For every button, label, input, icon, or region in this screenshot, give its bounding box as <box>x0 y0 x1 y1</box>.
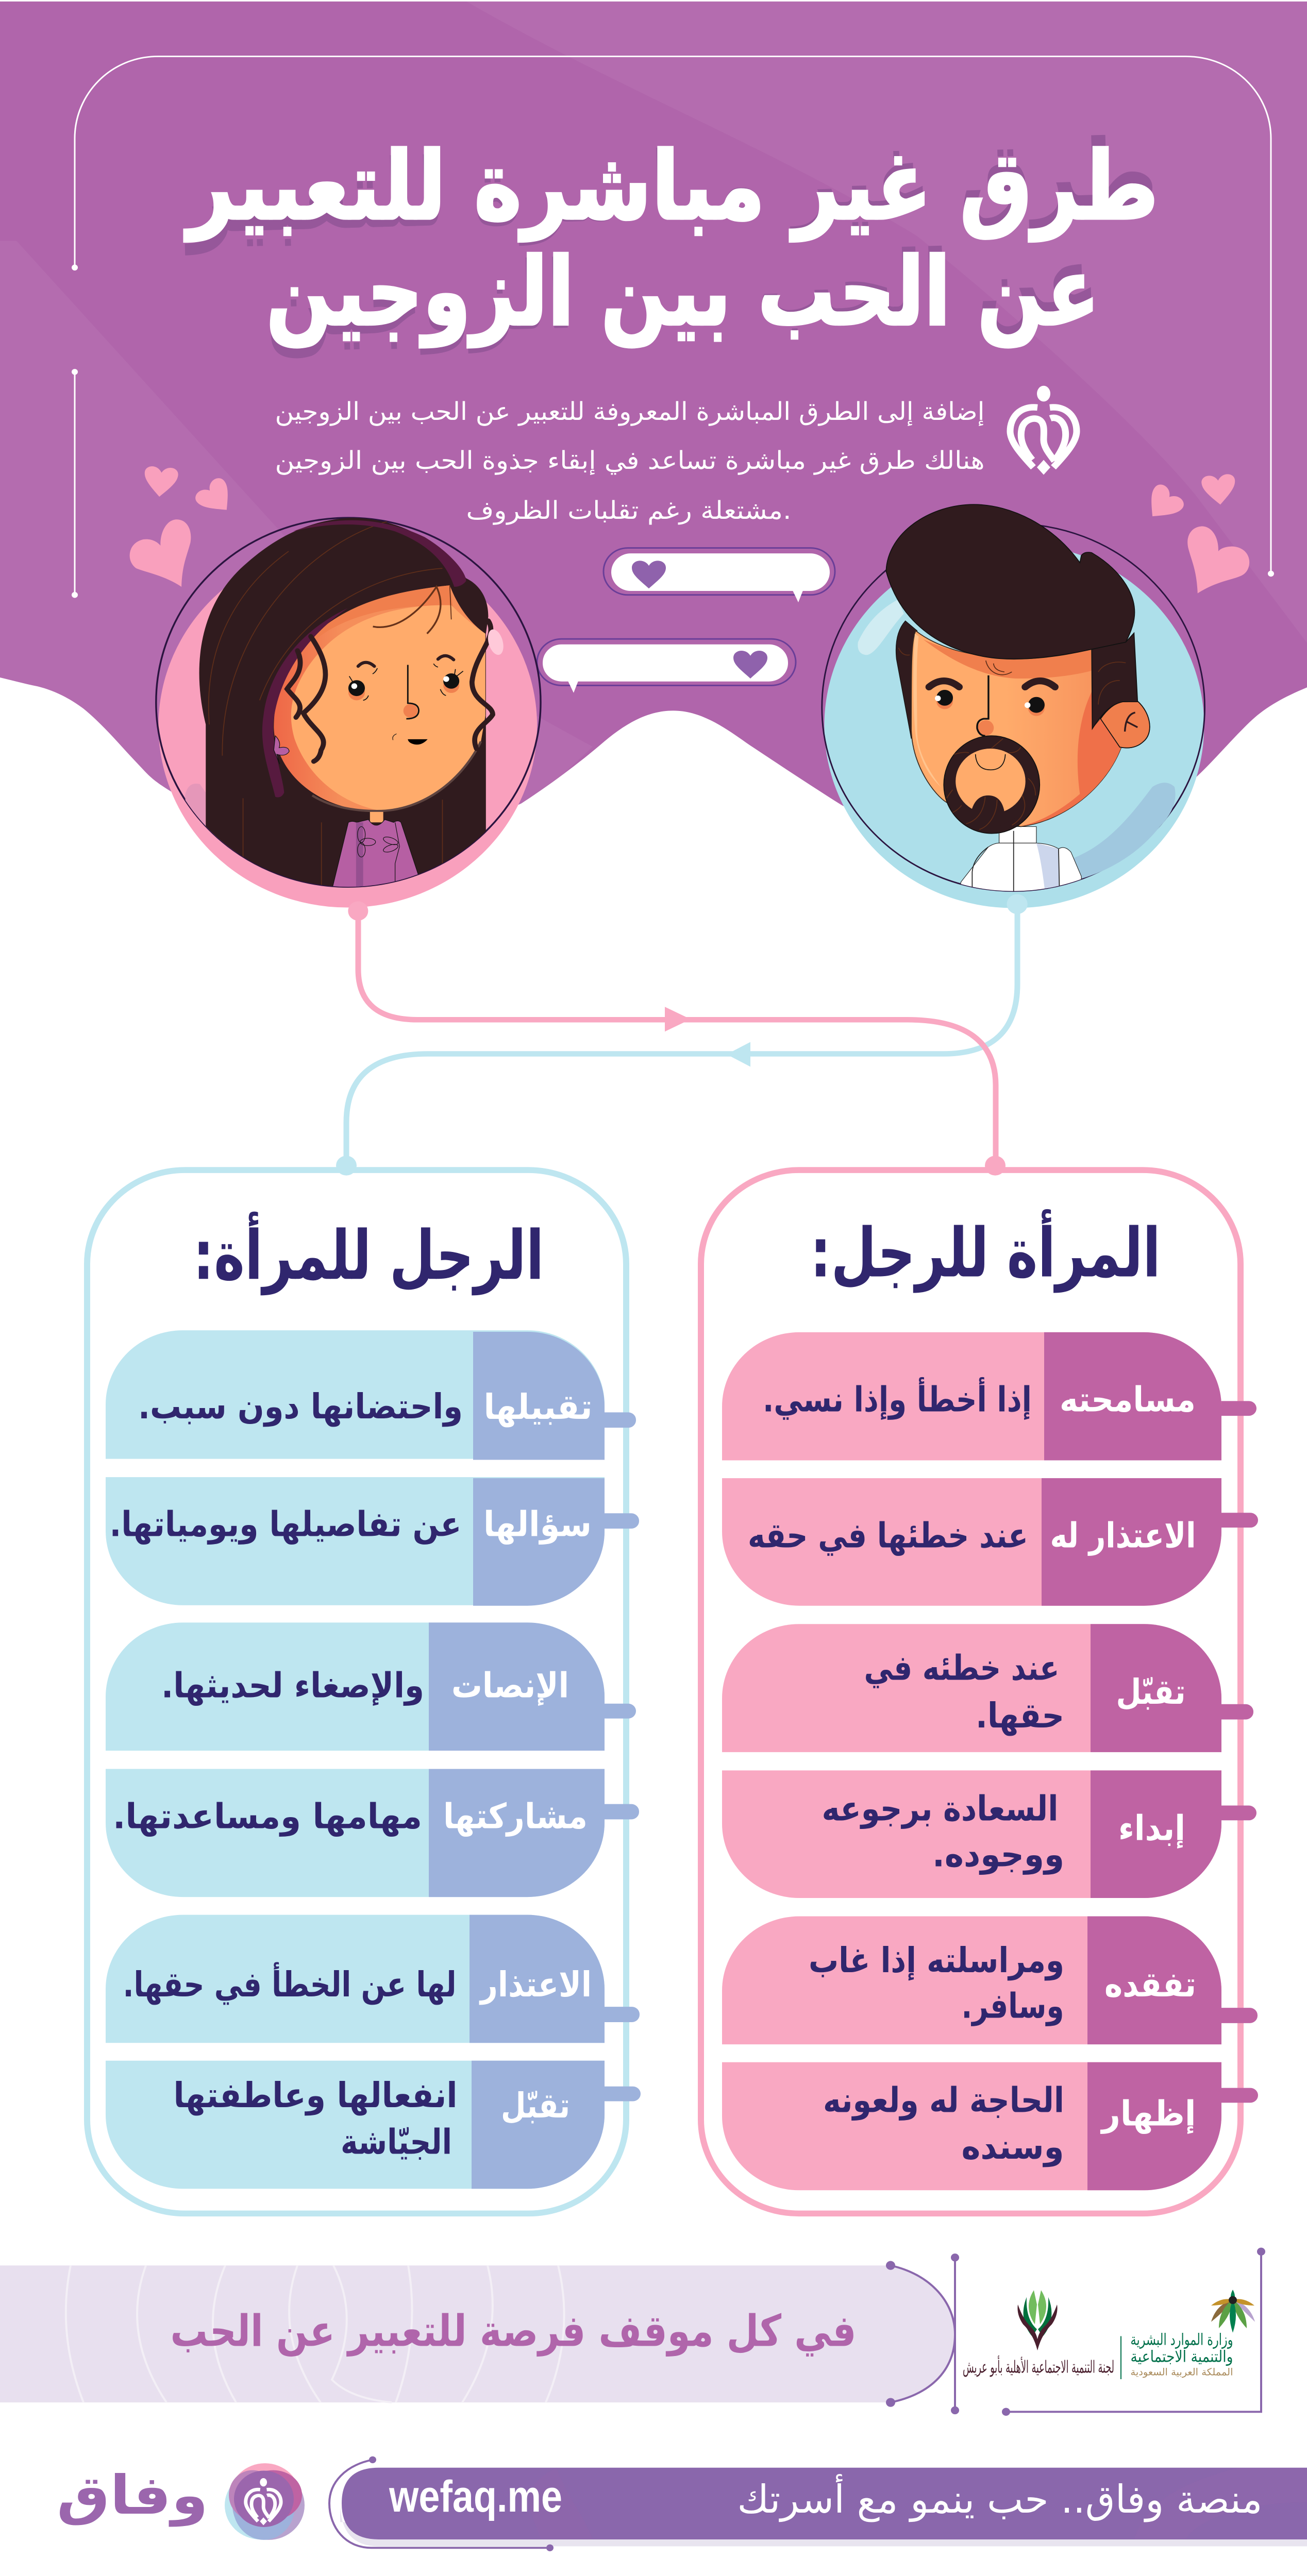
footer bar: wefaq.me <box>389 2471 562 2521</box>
illustration: man in blue circle <box>822 504 1249 914</box>
speech bubble with heart (woman) <box>537 639 796 693</box>
row: تقبّل: انفعالها وعاطفتها <box>174 2075 457 2116</box>
panel heading: المرأة للرجل: <box>810 1209 1161 1293</box>
header background with wave <box>0 2 1307 866</box>
row: تقبيلها: تقبيلها <box>483 1387 593 1428</box>
banner: closing message <box>0 2261 955 2407</box>
logo: ministry: المملكة العربية السعودية <box>1131 2366 1233 2378</box>
row: مشاركتها: مهامها ومساعدتها. <box>113 1797 422 1837</box>
row: تفقده: تفقده <box>1104 1964 1196 2005</box>
row: إظهار: وسنده <box>962 2127 1064 2167</box>
big heart right <box>1187 527 1249 594</box>
row: الإنصات <box>106 1622 636 1751</box>
intro text <box>275 397 984 525</box>
intro text: إضافة إلى الطرق المباشرة المعروفة للتعبير عن الحب بين الزوجين <box>275 397 984 427</box>
row: إبداء: السعادة برجوعه <box>822 1789 1059 1829</box>
intro text: .مشتعلة رغم تقلبات الظروف <box>466 496 791 525</box>
logo: ministry <box>1121 2290 1255 2379</box>
row: مشاركتها: مشاركتها <box>443 1797 588 1837</box>
row: مسامحته: إذا أخطأ وإذا نسي. <box>763 1377 1032 1420</box>
logo: ministry: والتنمية الاجتماعية <box>1131 2348 1233 2366</box>
row: إظهار: إظهار <box>1100 2094 1196 2134</box>
row: الاعتذار له: الاعتذار له <box>1050 1516 1196 1556</box>
row: مسامحته <box>722 1332 1256 1461</box>
row: تقبّل: عند خطئه في <box>864 1648 1059 1688</box>
row: تقبّل: حقها. <box>976 1696 1064 1736</box>
row: تفقده: وسافر. <box>962 1986 1064 2026</box>
logo: wefaq: وفاق <box>57 2464 208 2527</box>
icons: small hearts <box>143 466 1237 527</box>
row: تقبّل <box>106 2061 641 2189</box>
row: الاعتذار له <box>722 1478 1258 1606</box>
row: إبداء <box>722 1770 1256 1898</box>
intro text: هنالك طرق غير مباشرة تساعد في إبقاء جذوة الحب بين الزوجين <box>275 446 984 476</box>
row: تقبّل: الجيّاشة <box>341 2122 452 2162</box>
row: إبداء: إبداء <box>1118 1808 1185 1849</box>
footer bar <box>329 2456 1307 2551</box>
banner: closing message: في كل موقف فرصة للتعبير عن الحب <box>170 2306 856 2357</box>
row: الاعتذار له: عند خطئها في حقه <box>748 1516 1028 1556</box>
row: سؤالها: سؤالها <box>483 1504 592 1545</box>
row: الاعتذار: لها عن الخطأ في حقها. <box>123 1961 457 2005</box>
panel heading: الرجل للمرأة: <box>193 1211 544 1296</box>
row: الإنصات: والإصغاء لحديثها. <box>161 1666 424 1706</box>
big heart left <box>130 519 191 587</box>
row: سؤالها <box>106 1477 639 1606</box>
panel: man to woman <box>87 1156 641 2213</box>
row: تفقده: ومراسلته إذا غاب <box>809 1940 1064 1981</box>
illustration: woman in pink circle <box>130 518 541 921</box>
logo: local committee: لجنة التنمية الاجتماعية الأهلية بأبو عريش <box>963 2355 1114 2377</box>
row: الاعتذار <box>106 1915 640 2043</box>
row: الإنصات: الإنصات <box>451 1666 569 1706</box>
logo: ministry: وزارة الموارد البشرية <box>1131 2331 1233 2349</box>
row: الاعتذار: الاعتذار <box>479 1964 592 2005</box>
title <box>181 117 1159 360</box>
row: تفقده <box>722 1917 1258 2044</box>
footer bar: منصة وفاق.. حب ينمو مع أسرتك <box>737 2475 1262 2522</box>
row: تقبيلها: واحتضانها دون سبب. <box>138 1386 463 1427</box>
icon: wefaq knot logo <box>1010 386 1077 474</box>
title: عن الحب بين الزوجين <box>264 225 1100 360</box>
panel: woman to man <box>701 1156 1258 2213</box>
title: عن الحب بين الزوجين <box>266 237 1099 348</box>
row: سؤالها: عن تفاصيلها ويومياتها. <box>109 1504 461 1545</box>
decorative header frame <box>72 56 1274 598</box>
partner logos frame <box>951 2248 1265 2416</box>
row: مشاركتها <box>106 1769 639 1897</box>
row: إبداء: ووجوده. <box>932 1835 1064 1875</box>
row: إظهار: الحاجة له ولعونه <box>823 2080 1064 2121</box>
row: تقبّل <box>722 1624 1253 1752</box>
connector: man to left panel <box>346 894 1028 1165</box>
row: إظهار <box>722 2062 1258 2190</box>
speech bubble with heart (man) <box>604 548 835 602</box>
row: تقبيلها <box>106 1330 636 1460</box>
row: مسامحته: مسامحته <box>1060 1380 1196 1420</box>
row: تقبّل: تقبّل <box>501 2086 570 2126</box>
connector: woman to right panel <box>358 911 996 1165</box>
row: تقبّل: تقبّل <box>1116 1672 1185 1712</box>
logo: wefaq <box>57 2463 305 2540</box>
logo: local committee <box>963 2290 1114 2377</box>
